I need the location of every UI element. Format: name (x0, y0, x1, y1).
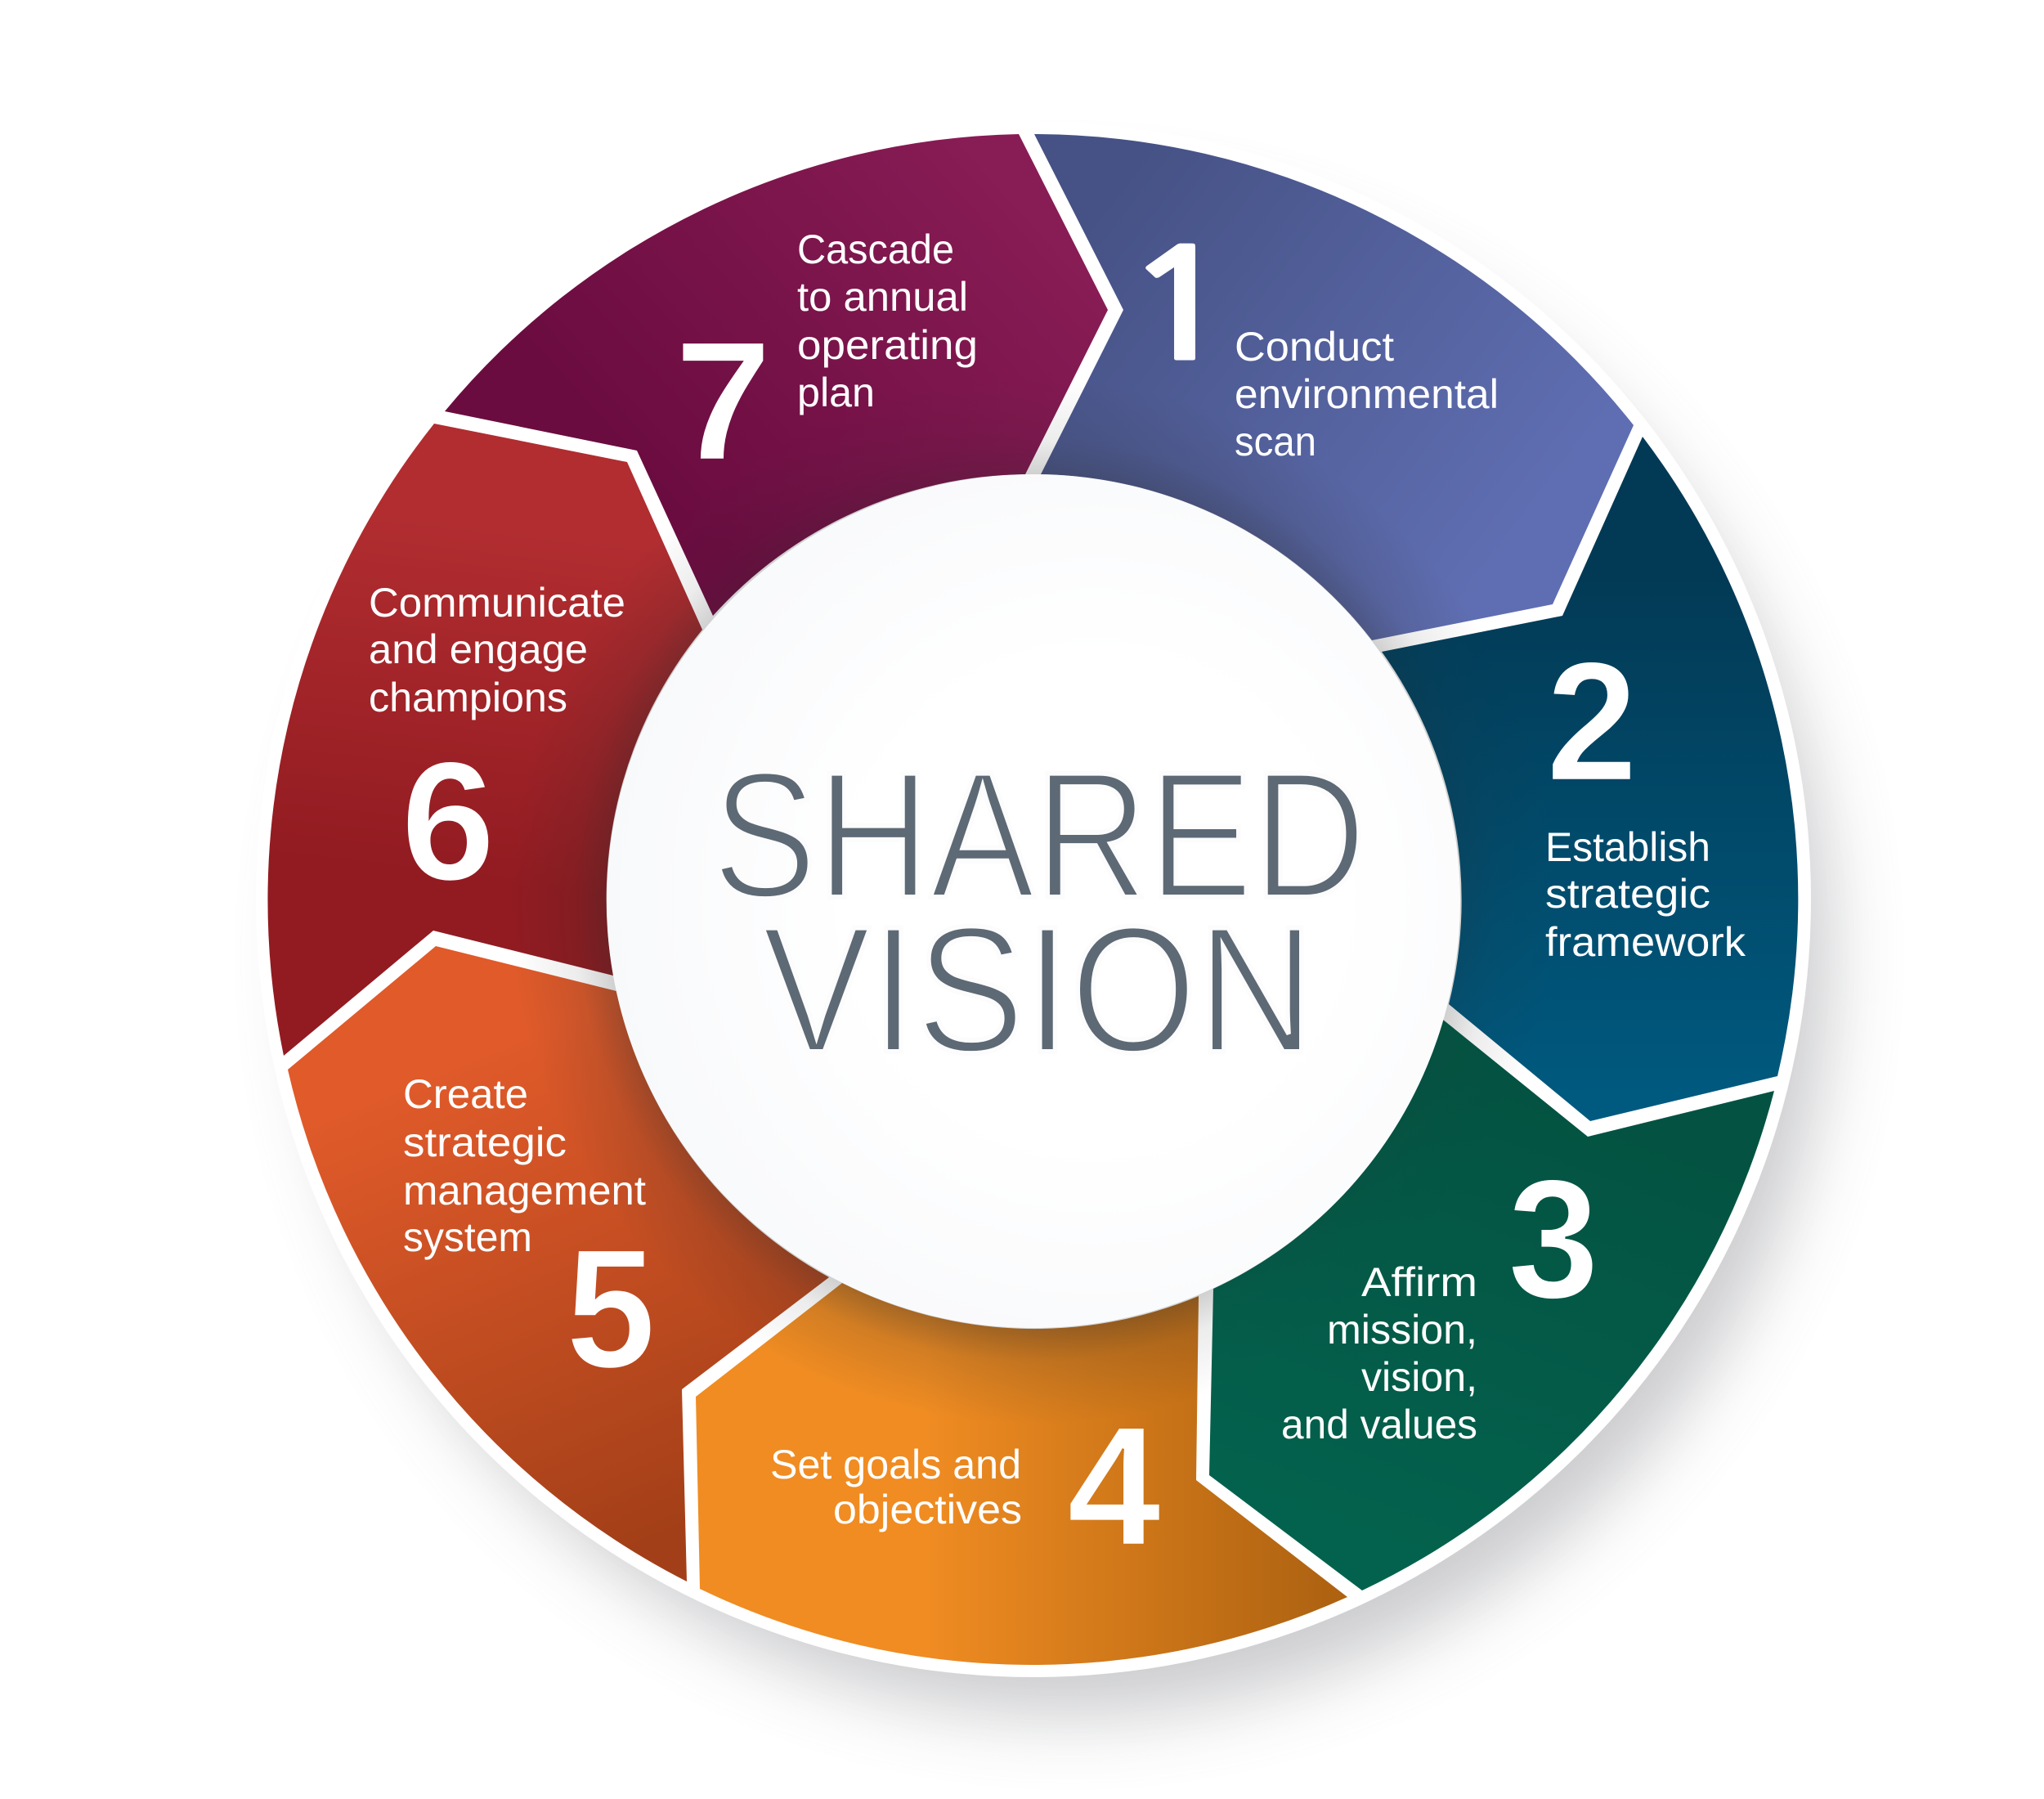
segment 1: Conduct environmental scan (1034, 134, 1634, 640)
segment 7: Cascade to annual operating plan: operating (797, 322, 978, 368)
segment 4: Set goals and objectives: 4 (1067, 1392, 1161, 1581)
segment 7: Cascade to annual operating plan: plan (797, 370, 875, 415)
segment 3: Affirm mission, vision, and values: vision, (1361, 1354, 1477, 1400)
segment 5: Create strategic management system: 5 (566, 1214, 656, 1404)
segment 2: Establish strategic framework: framework (1545, 919, 1746, 965)
segment 1: Conduct environmental scan: Conduct (1235, 324, 1394, 370)
drop shadow behind wheel (309, 195, 1830, 1716)
segment 6: Communicate and engage champions (267, 424, 702, 1056)
segment 5: Create strategic management system: strategic (403, 1119, 567, 1165)
segment 5: Create strategic management system: system (403, 1214, 532, 1260)
segment 4: Set goals and objectives: objectives (833, 1487, 1022, 1532)
title: Shared Vision: VISION (762, 889, 1315, 1090)
segment 1: Conduct environmental scan: environmental (1235, 371, 1499, 417)
segment 6: Communicate and engage champions: Communicate (369, 580, 625, 626)
segment 1: Conduct environmental scan: 1 (1120, 231, 1240, 384)
segment 3: Affirm mission, vision, and values: 3 (1508, 1145, 1599, 1335)
segment 6: Communicate and engage champions: and engage (369, 626, 588, 672)
shading in the white gaps near the centre (510, 378, 1557, 1424)
segment 3: Affirm mission, vision, and values (1209, 1020, 1774, 1590)
segment 3: Affirm mission, vision, and values: and values (1281, 1402, 1477, 1447)
segment 6: Communicate and engage champions: champions (369, 675, 567, 720)
segment 7: Cascade to annual operating plan: 7 (675, 307, 772, 496)
segment 2: Establish strategic framework: strategic (1545, 871, 1710, 917)
centre circle (607, 474, 1460, 1328)
title: Shared Vision (712, 734, 1366, 1090)
segment 3: Affirm mission, vision, and values: mission, (1327, 1307, 1477, 1353)
segment 6: Communicate and engage champions: 6 (401, 727, 495, 917)
segment 4: Set goals and objectives: Set goals and (770, 1442, 1021, 1487)
segment 5: Create strategic management system: Create (403, 1071, 528, 1117)
segment 5: Create strategic management system: management (403, 1168, 646, 1214)
segment 1: Conduct environmental scan: scan (1235, 419, 1316, 464)
segment 2: Establish strategic framework: Establish (1545, 824, 1710, 870)
segment 7: Cascade to annual operating plan (445, 134, 1108, 616)
segment 2: Establish strategic framework (1382, 437, 1798, 1121)
segment 2: Establish strategic framework: 2 (1546, 627, 1638, 817)
segment 4: Set goals and objectives (696, 1283, 1347, 1665)
segment 3: Affirm mission, vision, and values: Affirm (1361, 1259, 1477, 1305)
segment 7: Cascade to annual operating plan: to annual (797, 274, 968, 320)
segment 7: Cascade to annual operating plan: Cascade (797, 227, 954, 272)
white wheel backing ring (256, 122, 1811, 1677)
segment 5: Create strategic management system (288, 946, 829, 1581)
title: Shared Vision: SHARED (712, 734, 1366, 935)
